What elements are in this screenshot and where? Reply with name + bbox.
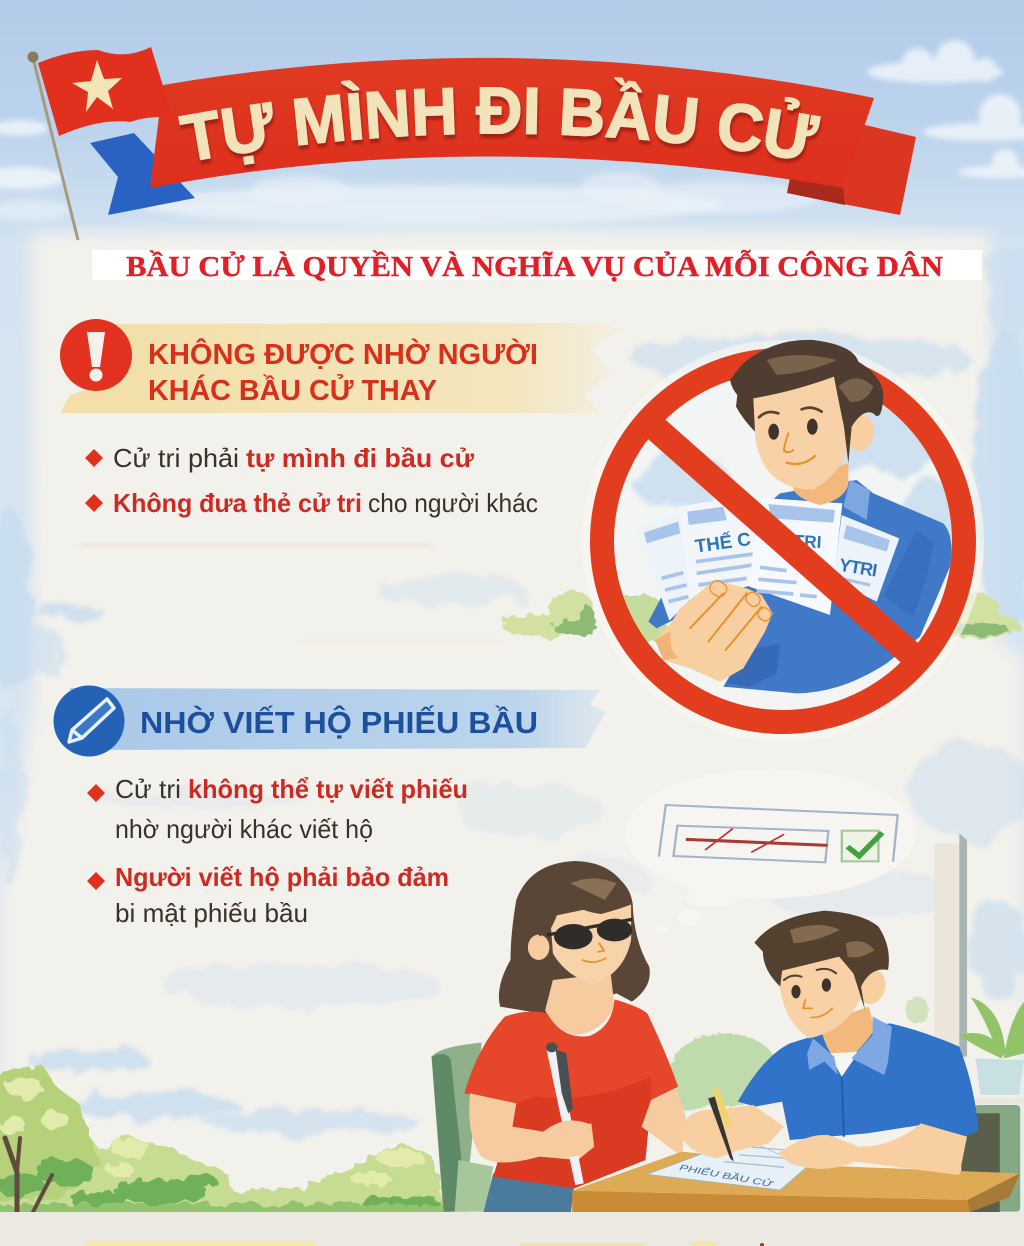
prohibition illustration <box>582 340 984 742</box>
pillar <box>934 833 967 1057</box>
heading text <box>148 337 538 407</box>
face <box>753 373 849 489</box>
thought bubble <box>625 768 916 934</box>
nose and smile <box>583 943 606 962</box>
fringe <box>536 868 633 937</box>
check box <box>842 831 882 861</box>
panel: assisted ballot writing <box>54 686 606 928</box>
bullet: go in person: tự mình đi bầu cử <box>246 443 474 473</box>
woman <box>464 861 686 1212</box>
man body and cards <box>637 480 951 693</box>
bullet: do not hand over card: cho người khác <box>368 488 538 518</box>
ear <box>854 968 889 1006</box>
bullet: keep ballot secret: bi mật phiếu bầu <box>115 898 308 928</box>
neck <box>793 463 848 505</box>
bullet: cannot write: nhờ người khác viết hộ <box>115 814 373 844</box>
arms <box>469 1093 594 1162</box>
card centre: TRI <box>793 531 822 552</box>
title: TỰ MÌNH ĐI BẦU CỬ <box>178 77 823 170</box>
sunglasses <box>547 919 632 949</box>
subtitle strip: BẦU CỬ LÀ QUYỀN VÀ NGHĨA VỤ CỦA MỖI CÔNG DÂN <box>126 251 943 283</box>
bullet: go in person: Cử tri phải <box>113 443 239 473</box>
heading band <box>60 323 622 413</box>
white cane <box>546 1042 584 1185</box>
bullet: go in person <box>85 443 474 473</box>
shirt <box>464 999 678 1188</box>
bullet: cannot write <box>87 774 468 844</box>
flag and title banner <box>28 47 916 240</box>
ballot sketch <box>659 805 898 862</box>
ear <box>844 413 877 454</box>
heading text: KHÁC BẦU CỬ THAY <box>148 373 437 407</box>
hand on cane <box>542 1120 594 1157</box>
background foliage <box>663 997 929 1110</box>
card right <box>833 515 899 602</box>
card centre <box>749 498 842 615</box>
bullet: do not hand over card <box>85 488 538 518</box>
bullet: keep ballot secret <box>87 862 449 928</box>
pen <box>708 1088 734 1162</box>
undershirt <box>828 1052 859 1077</box>
icon: exclamation <box>60 319 132 391</box>
background bushes beside the sign <box>502 592 1019 639</box>
flag star <box>72 60 122 112</box>
eyes and brows <box>759 408 822 440</box>
bullet: cannot write: Cử tri <box>115 774 181 804</box>
card left <box>644 522 690 621</box>
panel: do not delegate <box>60 319 622 518</box>
shirt <box>738 1023 979 1140</box>
man head <box>730 340 883 505</box>
sign backing <box>590 340 984 643</box>
bullet: cannot write: không thể tự viết phiếu <box>188 774 468 804</box>
man at table <box>647 911 979 1190</box>
cropped next section marks <box>85 1241 764 1246</box>
card second <box>680 501 755 600</box>
collar <box>807 1017 892 1075</box>
struck line <box>686 829 828 852</box>
nose and smile <box>803 1000 832 1017</box>
table <box>572 1152 1020 1212</box>
red ribbon tail <box>787 125 916 215</box>
hand <box>655 578 773 682</box>
bullet: keep ballot secret: Người viết hộ phải bảo đảm <box>115 862 449 892</box>
bullet: do not hand over card: Không đưa thẻ cử tri <box>113 488 362 518</box>
neck <box>821 1007 875 1065</box>
prohibition ring <box>602 360 964 722</box>
resting arm <box>778 1123 967 1175</box>
trees lower left <box>0 1066 450 1225</box>
hair <box>730 340 883 463</box>
shirt <box>648 480 951 693</box>
ballot paper <box>647 1138 807 1190</box>
back hair <box>499 861 650 1015</box>
chair: woman <box>432 1043 493 1212</box>
heading text: KHÔNG ĐƯỢC NHỜ NGƯỜI <box>148 337 538 371</box>
potted plant <box>959 997 1024 1104</box>
flag pole <box>28 52 78 240</box>
illustration: assistant and voter <box>432 768 1024 1213</box>
card second: THẾ C <box>694 528 752 557</box>
neck <box>545 973 615 1035</box>
face <box>550 900 631 984</box>
prohibition slash <box>654 427 912 655</box>
hair <box>754 911 889 1010</box>
face <box>776 943 863 1038</box>
jeans <box>484 1173 574 1212</box>
writing arm <box>679 1105 784 1158</box>
heading text: NHỜ VIẾT HỘ PHIẾU BẦU <box>140 704 538 740</box>
heading band <box>70 688 606 750</box>
red banner <box>150 58 874 188</box>
bottom paper strip <box>0 1212 1024 1246</box>
flag <box>38 47 173 136</box>
chair: assistant <box>961 1105 1020 1213</box>
nose and smile <box>784 433 815 464</box>
card right: YTRI <box>838 555 879 581</box>
ballot paper: PHIẾU BẦU CỬ <box>678 1162 775 1189</box>
blue ribbon tail <box>90 133 195 215</box>
eyes and brows <box>784 969 836 998</box>
icon: pencil <box>54 686 124 756</box>
